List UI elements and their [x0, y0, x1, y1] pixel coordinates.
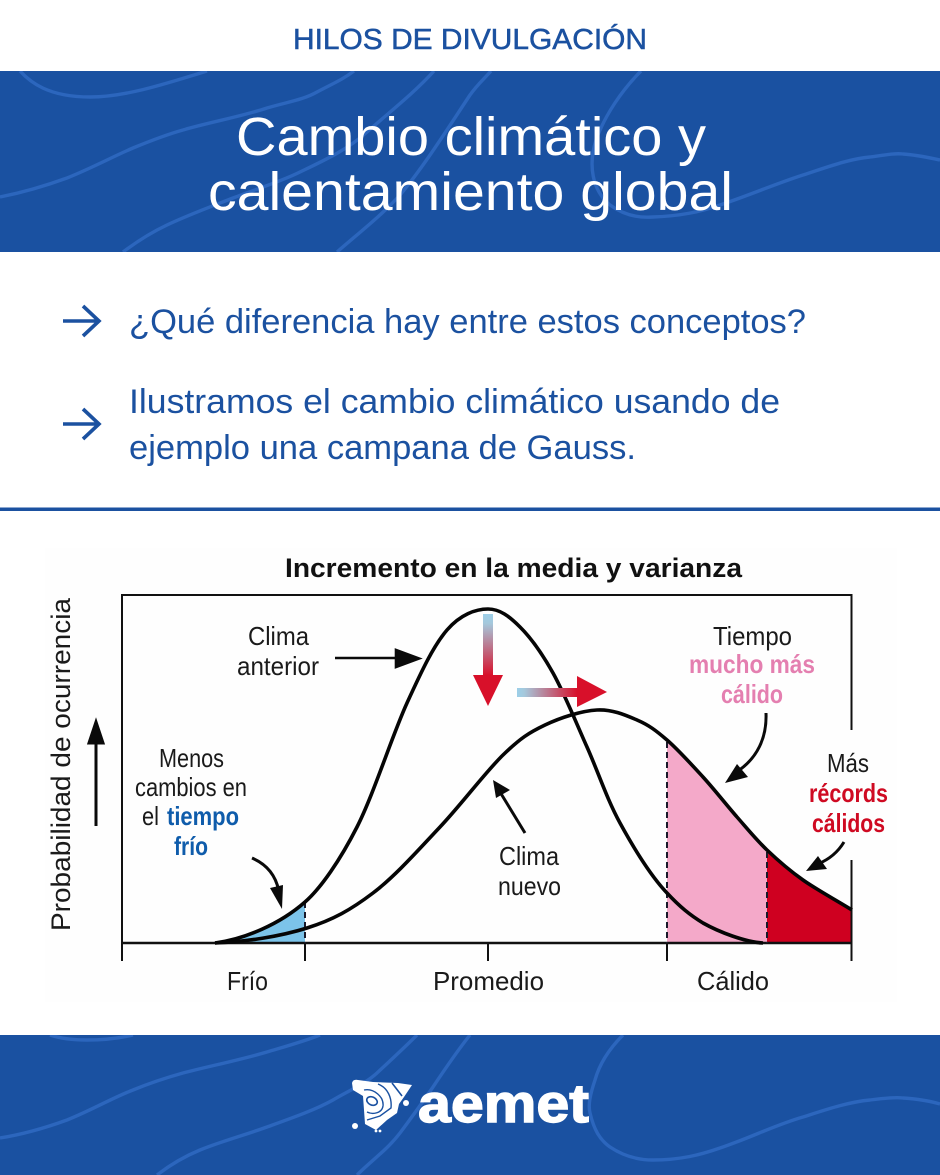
title	[208, 107, 733, 222]
top label: HILOS DE DIVULGACIÓN	[293, 23, 647, 56]
arrow: hot records	[806, 842, 844, 871]
bullet 1: ¿Qué diferencia hay entre estos conceptos?	[129, 303, 806, 341]
arrow: y axis up	[89, 722, 103, 826]
label: previous climate	[237, 621, 319, 681]
label: new climate	[498, 841, 561, 901]
x axis labels: Cálido	[697, 966, 769, 996]
label: cold weather: Menos	[159, 743, 224, 773]
arrow: shift to warmer	[517, 676, 607, 707]
label: hot records	[809, 748, 888, 838]
arrow: previous climate	[335, 650, 419, 667]
curve: previous climate	[215, 609, 763, 943]
label: much warmer weather	[689, 621, 815, 709]
bullet 2: Ilustramos el cambio climático usando de	[129, 383, 780, 421]
title: Cambio climático y	[236, 107, 706, 167]
logo: aemet	[352, 1074, 589, 1134]
icon: Iberian peninsula contours	[352, 1080, 412, 1132]
icon: arrow 1	[63, 306, 99, 336]
label: hot records: Más	[827, 748, 869, 778]
icon: arrow 2	[63, 409, 99, 439]
label: previous climate: Clima	[248, 621, 309, 651]
label: cold weather	[135, 743, 247, 861]
label: new climate: Clima	[499, 841, 559, 871]
label: previous climate: anterior	[237, 651, 319, 681]
x axis labels	[227, 966, 769, 996]
label: much warmer weather: Tiempo	[713, 621, 792, 651]
y axis label: Probabilidad de ocurrencia	[46, 597, 76, 931]
arrow: much warmer weather	[725, 713, 766, 783]
header band	[0, 71, 940, 252]
area: much warmer weather	[667, 740, 767, 943]
label: cold weather: frío	[174, 831, 208, 861]
arrow: new climate	[493, 780, 525, 833]
chart: Gaussian distribution shift	[45, 548, 897, 1002]
bullet 2: ejemplo una campana de Gauss.	[129, 429, 636, 467]
arrow: mean decrease	[473, 614, 503, 706]
title: calentamiento global	[208, 162, 733, 222]
label: new climate: nuevo	[498, 871, 561, 901]
label: cold weather: el	[142, 801, 159, 831]
label: cold weather: tiempo	[167, 801, 239, 831]
label: hot records: cálidos	[812, 808, 885, 838]
footer band	[0, 1035, 940, 1175]
arrow: cold weather	[252, 858, 283, 909]
curve: new climate	[215, 710, 852, 943]
logo: aemet: aemet	[418, 1074, 589, 1134]
label: hot records: récords	[809, 778, 888, 808]
area: hot records	[767, 850, 852, 943]
area: cold weather	[215, 902, 305, 943]
x axis labels: Frío	[227, 966, 268, 996]
label: cold weather: cambios en	[135, 772, 247, 802]
chart title: Incremento en la media y varianza	[285, 553, 743, 583]
bullet 2	[63, 383, 780, 467]
label: much warmer weather: cálido	[721, 679, 783, 709]
label: much warmer weather: mucho más	[689, 649, 815, 679]
x axis labels: Promedio	[433, 966, 544, 996]
